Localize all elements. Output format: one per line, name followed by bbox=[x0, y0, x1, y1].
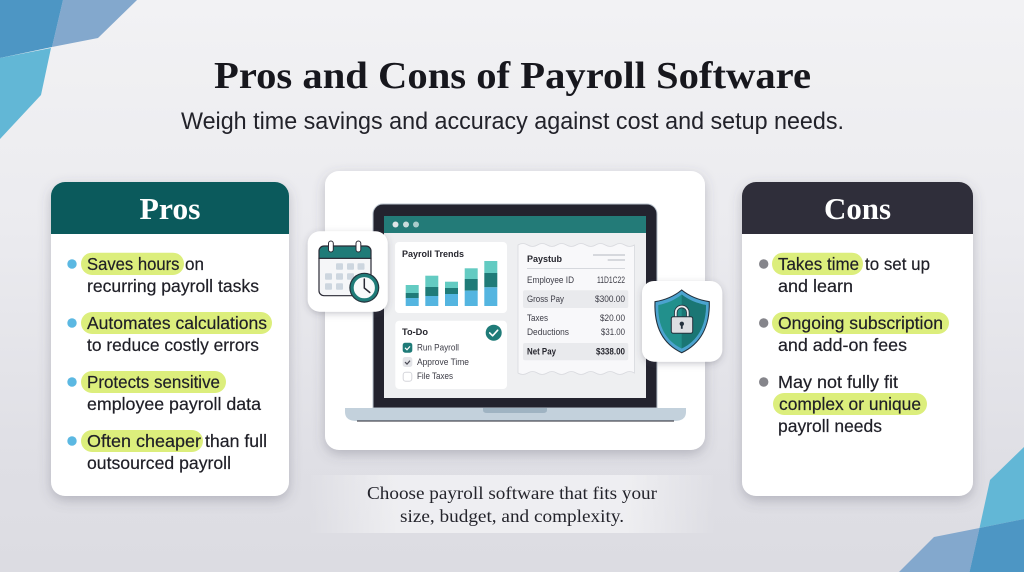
to-do card: To-Do bbox=[402, 327, 429, 337]
cons item 1: to set up bbox=[865, 254, 930, 274]
callout: bottom recommendation bbox=[308, 475, 716, 533]
pros item 2: Automates calculations bbox=[87, 313, 267, 333]
paystub: $31.00 bbox=[601, 327, 625, 337]
cons item 3: payroll needs bbox=[778, 416, 882, 436]
title: Pros and Cons of Payroll Software bbox=[214, 55, 811, 97]
laptop bezel bbox=[373, 204, 657, 408]
pros item 1 bbox=[67, 253, 259, 296]
laptop base bbox=[345, 408, 686, 421]
paystub: $20.00 bbox=[600, 313, 625, 323]
cons item 1: and learn bbox=[778, 276, 853, 296]
pros item 3: employee payroll data bbox=[87, 394, 261, 414]
paystub: Paystub bbox=[527, 254, 562, 264]
app title bar bbox=[384, 216, 646, 233]
pros header bbox=[51, 182, 289, 234]
paystub: 11D1C22 bbox=[597, 275, 625, 285]
cons item 3 bbox=[759, 372, 927, 436]
chart: payroll trends bbox=[395, 242, 507, 313]
laptop screen bbox=[384, 216, 646, 398]
pros item 2: to reduce costly errors bbox=[87, 335, 259, 355]
pros item 4 bbox=[67, 430, 267, 473]
chart: payroll trends: Payroll Trends bbox=[402, 249, 464, 259]
paystub: Taxes bbox=[527, 313, 548, 323]
laptop bbox=[345, 204, 686, 421]
cons item 2: Ongoing subscription bbox=[778, 313, 943, 333]
to-do card: Run Payroll bbox=[417, 342, 459, 352]
panel: pros bbox=[51, 182, 289, 496]
cons item 3: complex or unique bbox=[779, 394, 921, 414]
paystub: $338.00 bbox=[596, 346, 625, 356]
to-do card bbox=[395, 321, 507, 389]
panel: laptop illustration card bbox=[308, 171, 722, 450]
pros item 3 bbox=[67, 371, 261, 414]
decoration: bottom-right shapes bbox=[899, 447, 1024, 572]
pros item 1: Saves hours bbox=[87, 254, 180, 274]
pros item 2 bbox=[67, 312, 272, 355]
pros item 1: recurring payroll tasks bbox=[87, 276, 259, 296]
callout: bottom recommendation: size, budget, and complexity. bbox=[400, 506, 624, 526]
to-do card: File Taxes bbox=[417, 371, 453, 381]
pros item 1: on bbox=[185, 254, 204, 274]
pros item 4: outsourced payroll bbox=[87, 453, 231, 473]
cons item 2 bbox=[759, 312, 949, 355]
paystub: $300.00 bbox=[595, 294, 625, 304]
pros item 3: Protects sensitive bbox=[87, 372, 220, 392]
cons item 1 bbox=[759, 253, 930, 296]
to-do card: Approve Time bbox=[417, 357, 469, 367]
callout: bottom recommendation: Choose payroll software that fits your bbox=[367, 483, 657, 503]
cons item 1: Takes time bbox=[778, 254, 859, 274]
paystub: Deductions bbox=[527, 327, 569, 337]
cons heading: Cons bbox=[824, 191, 891, 226]
paystub: Employee ID bbox=[527, 275, 574, 285]
paystub: Net Pay bbox=[527, 346, 556, 356]
icon: security shield bbox=[642, 281, 722, 362]
pros heading: Pros bbox=[140, 191, 200, 226]
pros item 4: than full bbox=[205, 431, 267, 451]
cons header bbox=[742, 182, 973, 234]
subtitle: Weigh time savings and accuracy against cost and setup needs. bbox=[181, 108, 844, 135]
panel: cons bbox=[742, 182, 973, 496]
paystub: Gross Pay bbox=[527, 294, 564, 304]
pros item 4: Often cheaper bbox=[87, 431, 201, 451]
icon: calendar with clock bbox=[308, 231, 388, 312]
cons item 2: and add-on fees bbox=[778, 335, 907, 355]
paystub bbox=[518, 244, 634, 374]
decoration: top-left shapes bbox=[0, 0, 137, 139]
cons item 3: May not fully fit bbox=[778, 372, 898, 392]
